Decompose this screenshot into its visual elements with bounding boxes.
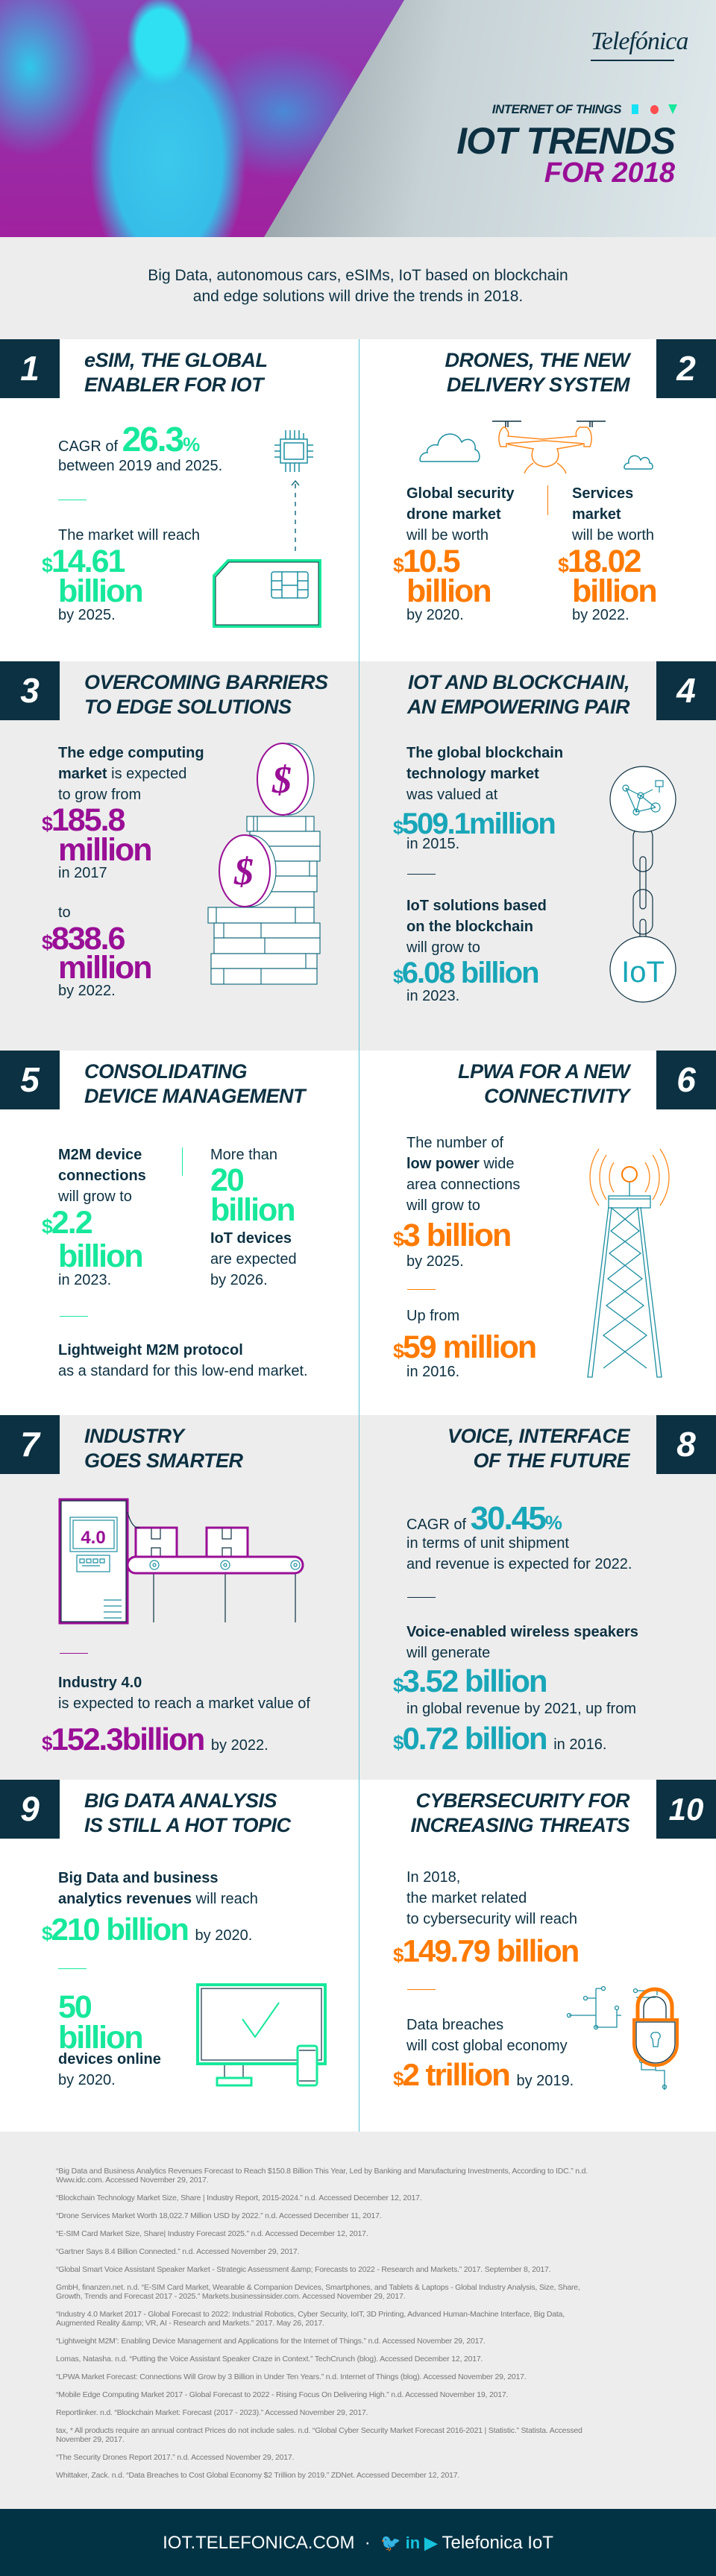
stat: services: Services [572,485,633,502]
title: IOT TRENDS [456,120,675,162]
text [58,1675,310,1712]
panel: 9 big data: 9 [20,1789,40,1828]
references: “LPWA Market Forecast: Connections Will Grow by 3 Billion in Under Ten Years.” n.d. Internet of Things (blog). Accessed November 29, 2017. [56,2372,527,2381]
logo: Telefónica [591,28,688,55]
text: Big Data and business [58,1870,218,1886]
panel: 2 drones [359,339,716,661]
text: will grow to [406,1197,480,1214]
references [0,2132,716,2509]
panel: 8 voice [359,1415,716,1780]
heading: ENABLER FOR IOT [84,374,263,396]
panel: 3 edge: million [58,950,151,986]
panel: 5 device management: billion [58,1238,142,1274]
footer [0,2509,716,2576]
panel: 7 industry [0,1415,359,1780]
heading: IOT AND BLOCKCHAIN, [408,671,629,693]
panel: 5 device management [0,1051,359,1415]
panel: 4 blockchain: in 2023. [406,988,459,1004]
stat: services: will be worth [572,527,654,544]
panel: 9 big data: billion [58,2020,142,2056]
panel: 5 device management: in 2023. [58,1272,111,1288]
heading [445,349,631,396]
panel: 3 edge: 3 [20,671,40,710]
stat: services: market [572,506,621,523]
references: “E-SIM Card Market Size, Share| Industry Forecast 2025.” n.d. Accessed December 12, 2017. [56,2229,368,2238]
intro: and edge solutions will drive the trends in 2018. [193,288,523,305]
panel: 2 drones: $10.5 [393,544,459,579]
icon: drone and clouds [419,421,653,473]
panel: 3 edge: to [58,904,71,921]
panel: 6 lpwa: in 2016. [406,1364,459,1380]
footer: IOT.TELEFONICA.COM · 🐦 in ▶ Telefonica IoT [163,2533,553,2553]
panel: 5 device management: 5 [20,1060,40,1099]
stat m2m: connections [58,1168,146,1184]
panel: 6 lpwa [359,1051,716,1415]
stat: services [572,485,654,544]
panel: 2 drones: by 2020. [406,607,464,623]
icon: padlock [567,1986,679,2090]
references: Whittaker, Zack. n.d. “Data Breaches to Cost Global Economy $2 Trillion by 2019.” ZDNet. Accessed December 12, 2017. [56,2471,459,2480]
panel: 8 voice: and revenue is expected for 2022. [406,1556,632,1572]
panel: 1 esim: 1 [20,349,40,388]
text: was valued at [406,787,497,803]
panel: 6 lpwa: $59 million [393,1329,536,1365]
heading: LPWA FOR A NEW [458,1060,629,1083]
panel: 2 drones: by 2022. [572,607,629,623]
references: “Lightweight M2M’: Enabling Device Management and Applications for the Internet of Things.” n.d. Accessed November 29, 2017. [56,2337,486,2346]
text: the market related [406,1890,527,1906]
heading [84,1425,243,1472]
panel: 1 esim: by 2025. [58,607,116,623]
heading [84,349,268,396]
heading: AN EMPOWERING PAIR [407,696,629,718]
panel: 3 edge: million [58,832,151,868]
icon: coin stack [207,743,321,985]
panel: 4 blockchain: will grow to [406,939,480,956]
heading [410,1789,629,1836]
panel: 2 drones: billion [572,573,656,609]
panel: 10 cybersecurity: Data breaches [406,2017,503,2033]
heading [84,1060,307,1107]
heading: GOES SMARTER [84,1449,243,1472]
heading: OF THE FUTURE [473,1449,629,1472]
hero header photo [0,0,716,237]
text [58,1870,258,1907]
text: is expected to reach a market value of [58,1695,310,1712]
icon: monitor [196,1983,327,2086]
protocol note: Lightweight M2M protocol [58,1342,243,1358]
panel: 2 drones: billion [406,573,491,609]
panel: 8 voice: 8 [676,1425,696,1464]
panel: 5 device management: $2.2 [42,1205,92,1241]
text: The global blockchain [406,745,563,761]
hero photo duotone [0,0,404,237]
intro [0,237,716,339]
heading: eSIM, THE GLOBAL [84,349,268,371]
heading: VOICE, INTERFACE [448,1425,629,1447]
protocol note [58,1342,308,1379]
stat: security drones [406,485,515,544]
references: “Mobile Edge Computing Market 2017 - Global Forecast to 2022 - Rising Focus On Delivering High.” n.d. Accessed November 19, 2017. [56,2390,508,2399]
references: “The Security Drones Report 2017.” n.d. Accessed November 29, 2017. [56,2453,294,2462]
panel: 3 edge: by 2022. [58,983,116,999]
panel: 2 drones: $18.02 [558,544,640,579]
panel: 4 blockchain [359,661,716,1051]
panel: 8 voice: will generate [406,1645,490,1661]
panel: 8 voice: in global revenue by 2021, up from [406,1701,636,1717]
heading: DRONES, THE NEW [445,349,629,371]
panel: 5 device management: IoT devices [210,1230,292,1247]
panel: 2 drones: 2 [676,349,696,388]
text: Industry 4.0 [58,1675,142,1691]
text: analytics revenues will reach [58,1891,258,1907]
panel: 9 big data: devices online [58,2051,161,2068]
text [58,745,204,803]
text: The number of [406,1135,503,1151]
panel: 8 voice: Voice-enabled wireless speakers [406,1624,638,1640]
intro: Big Data, autonomous cars, eSIMs, IoT based on blockchain [148,267,568,284]
panel: 7 industry: 7 [20,1425,40,1464]
text: market is expected [58,766,186,782]
heading: DELIVERY SYSTEM [447,374,629,396]
heading: INDUSTRY [84,1425,184,1447]
stat: security drones: drone market [406,506,501,523]
panel: 3 edge: in 2017 [58,865,107,881]
panel: 9 big data [0,1780,359,2132]
panel: 10 cybersecurity [359,1780,716,2132]
references: Www.idc.com. Accessed November 29, 2017. [56,2176,208,2185]
icon: chain [609,766,676,1003]
icon: tower [587,1148,670,1378]
stat: security drones: Global security [406,485,515,502]
panel: 4 blockchain: on the blockchain [406,919,533,935]
panel: 6 lpwa: 6 [676,1060,696,1099]
icon: sim card [213,559,321,628]
panel: 1 esim: billion [58,573,142,609]
text: to cybersecurity will reach [406,1911,577,1927]
panel: 10 cybersecurity: 10 [669,1792,703,1827]
icon: coin stack: $ [271,759,292,802]
stat m2m: M2M device [58,1147,142,1163]
panel: 7 industry: $152.3billion by 2022. [42,1722,268,1757]
panel: 10 cybersecurity: will cost global economy [406,2038,568,2054]
panel: 6 lpwa: $3 billion [393,1218,510,1253]
text [406,1135,520,1214]
icon: chip [274,430,313,472]
panel: 5 device management: billion [210,1192,295,1228]
panel: 5 device management: are expected [210,1251,297,1267]
heading: INCREASING THREATS [410,1814,629,1836]
references: Augmented Reality &amp; VR, AI - Research and Markets.” 2017. May 26, 2017. [56,2319,324,2328]
references: “Industry 4.0 Market 2017 - Global Forecast to 2022: Industrial Robotics, Cyber Security, IoIT, 3D Printing, Advanced Human-Machine Interface, Big Data, [56,2310,565,2319]
panel: 1 esim [0,339,359,661]
heading: BIG DATA ANALYSIS [84,1789,277,1812]
value: $14.61 [42,544,124,579]
references: Lomas, Natasha. n.d. “Putting the Voice Assistant Speaker Craze in Context.” TechCrunch (blog). Accessed December 12, 2017. [56,2355,483,2364]
references: “Big Data and Business Analytics Revenues Forecast to Reach $150.8 Billion This Year, Led by Banking and Manufacturing Investments, According to IDC.” n.d. [56,2167,588,2176]
icon: factory machine: 4.0 [81,1528,106,1548]
panel: 3 edge: $185.8 [42,802,124,838]
icon: chain: IoT [621,956,665,989]
panel: 10 cybersecurity: $149.79 billion [393,1933,578,1968]
heading [458,1060,631,1107]
text: CAGR of 30.45% [406,1500,562,1537]
panel: 4 blockchain: $509.1million [393,807,555,840]
references: “Drone Services Market Worth 18,022.7 Million USD by 2022.” n.d. Accessed December 11, 2017. [56,2211,381,2220]
panel: 9 big data: 50 [58,1989,91,2025]
panel: 8 voice: $0.72 billion in 2016. [393,1721,606,1756]
text: The edge computing [58,745,204,761]
panel: 5 device management: 20 [210,1162,243,1198]
stat: security drones: will be worth [406,527,489,544]
panel: 3 edge [0,661,359,1051]
text: area connections [406,1177,520,1193]
references: “Gartner Says 8.4 Billion Connected.” n.d. Accessed November 29, 2017. [56,2247,299,2256]
panel: 9 big data: by 2020. [58,2072,116,2088]
panel: 5 device management: by 2026. [210,1272,268,1288]
stat m2m: will grow to [58,1188,132,1205]
heading [84,1789,291,1836]
panel: 1 esim: between 2019 and 2025. [58,458,222,474]
stat m2m [58,1147,146,1205]
text: to grow from [58,787,141,803]
panel: 9 big data: $210 billion by 2020. [42,1912,252,1947]
panel: 4 blockchain: in 2015. [406,836,459,852]
panel: 8 voice: $3.52 billion [393,1663,547,1698]
text: technology market [406,766,539,782]
panel: 8 voice: in terms of unit shipment [406,1535,569,1552]
icon: factory machine [58,1499,304,1624]
panel: 6 lpwa: Up from [406,1308,459,1324]
heading: IS STILL A HOT TOPIC [84,1814,291,1836]
panel: 10 cybersecurity: $2 trillion by 2019. [393,2057,574,2092]
references: “Blockchain Technology Market Size, Share | Industry Report, 2015-2024.” n.d. Accessed December 12, 2017. [56,2194,421,2202]
subtitle: INTERNET OF THINGS [492,102,621,116]
text: In 2018, [406,1869,460,1886]
panel: 3 edge: $838.6 [42,921,124,957]
text: low power wide [406,1156,515,1172]
heading [448,1425,631,1472]
panel: 4 blockchain: $6.08 billion [393,957,538,989]
arrow: dashed [291,480,300,551]
heading: CYBERSECURITY FOR [415,1789,629,1812]
stat iot devices: More than [210,1147,277,1163]
references: GmbH, finanzen.net. n.d. “E-SIM Card Market, Wearable & Companion Devices, Smartphones, and Tablets & Laptops - Global Industry Analysis, Size, Share, [56,2283,580,2292]
text [406,1869,577,1927]
references: “Global Smart Voice Assistant Speaker Market - Strategic Assessment &amp; Forecasts to 2022 - Research and Markets.” 2017. September 8, 2017. [56,2265,550,2274]
cagr: CAGR of 26.3% [58,420,200,459]
icon: coin stack: $ [233,851,254,893]
heading [84,671,328,718]
heading: CONNECTIVITY [484,1085,629,1107]
protocol note: as a standard for this low-end market. [58,1363,308,1379]
panel: 4 blockchain: 4 [676,671,696,710]
heading [407,671,629,718]
references: tax, * All products require an annual contract Prices do not include sales. n.d. “Global Cyber Security Market Forecast 2016-2021 | Statistic.” Statista. Accessed [56,2426,582,2435]
references: November 29, 2017. [56,2435,125,2444]
panel: 6 lpwa: by 2025. [406,1253,464,1270]
references: Growth, Trends and Forecast 2017 - 2025.” Markets.businessinsider.com. Accessed November 29, 2017. [56,2292,405,2301]
heading: CONSOLIDATING [84,1060,247,1083]
title year: FOR 2018 [544,157,675,189]
icons: shapes [632,104,677,114]
heading: DEVICE MANAGEMENT [84,1085,305,1107]
heading: OVERCOMING BARRIERS [84,671,328,693]
text [406,745,563,803]
references: Reportlinker. n.d. “Blockchain Market: Forecast (2017 - 2023).” Accessed November 29, 2017. [56,2408,368,2417]
panel: 4 blockchain: IoT solutions based [406,898,547,914]
panel: 1 esim: The market will reach [58,527,200,544]
heading: TO EDGE SOLUTIONS [84,696,292,718]
